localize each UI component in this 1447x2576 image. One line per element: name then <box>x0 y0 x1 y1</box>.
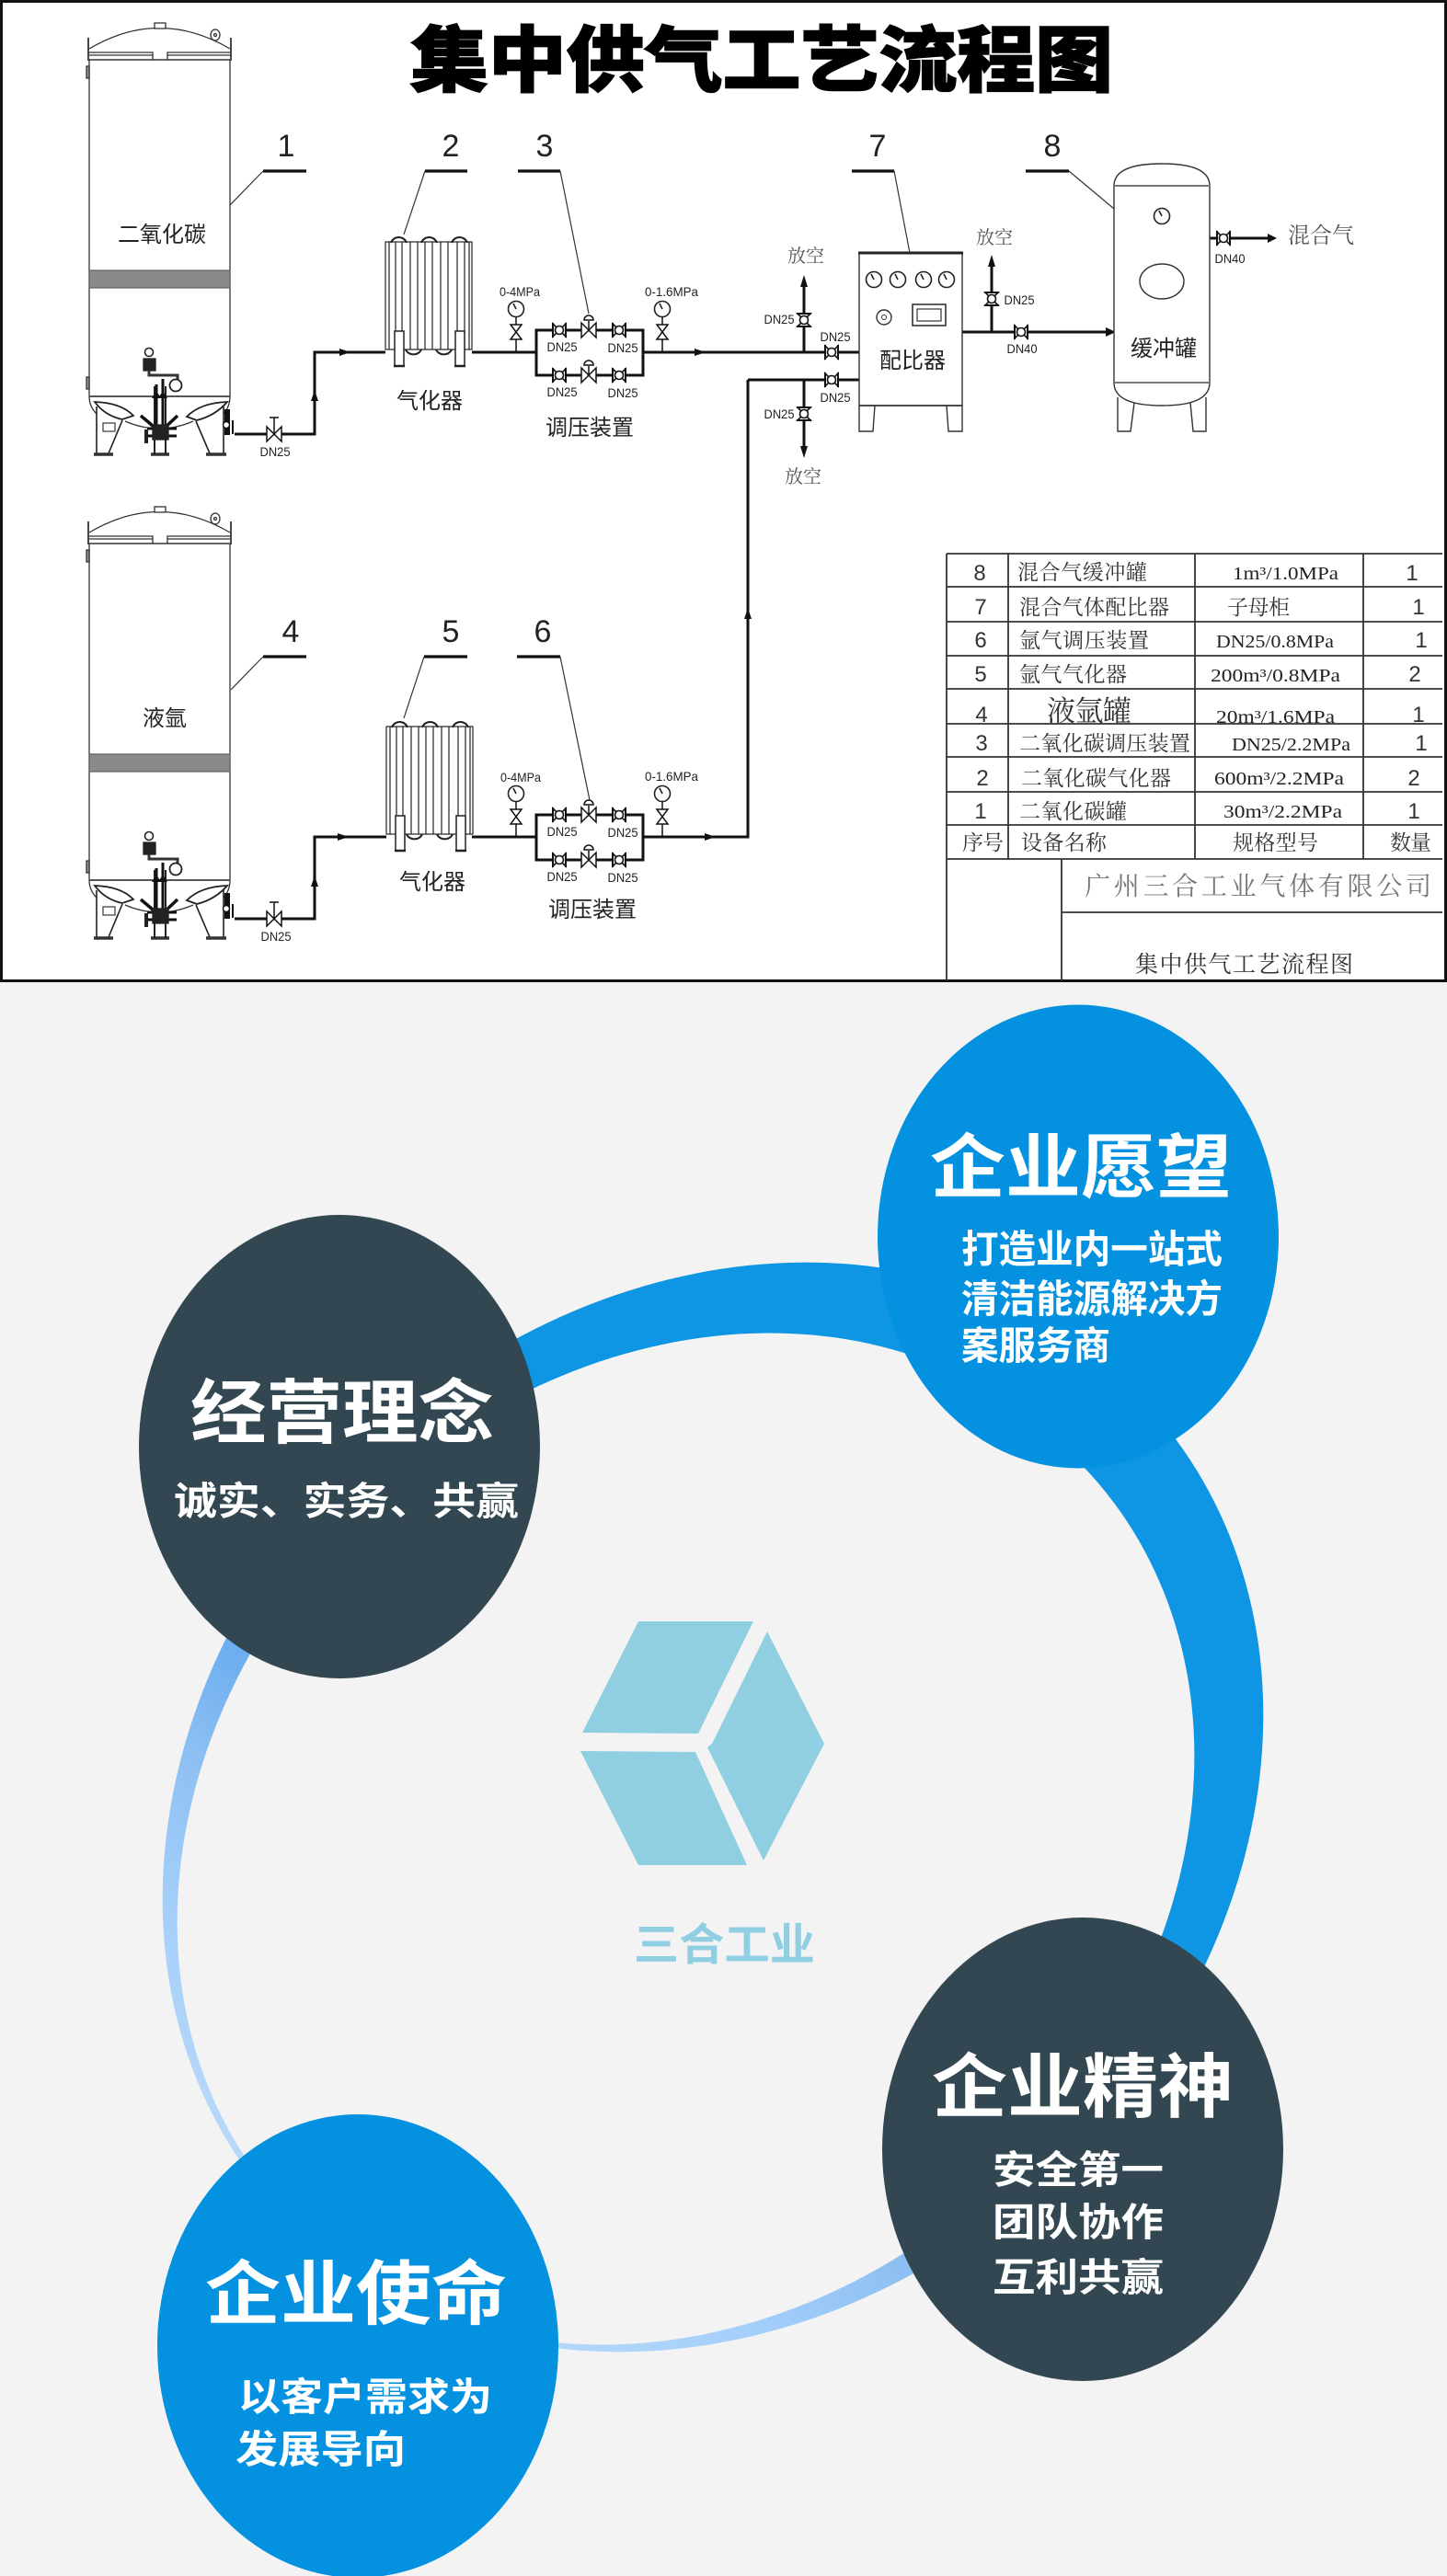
mixing cabinet 7 <box>858 253 963 431</box>
vaporizer 5 <box>386 722 473 895</box>
buffer tank 8 <box>1114 164 1210 431</box>
bubble: business philosophy <box>139 1215 540 1678</box>
pipework with arrows and tank outlet valves: DN25 <box>764 312 795 326</box>
callouts: item numbers with leader lines: 2 <box>442 129 459 164</box>
bubble: corporate spirit <box>882 1918 1283 2381</box>
equipment table: DN25/2.2MPa <box>1232 735 1350 755</box>
equipment table: 4 <box>975 703 988 727</box>
equipment table: 氩气气化器 <box>1019 663 1127 686</box>
equipment table: 20m³/1.6MPa <box>1216 707 1335 727</box>
bubble: corporate vision: 清洁能源解决方 <box>961 1277 1223 1321</box>
equipment table: 混合气体配比器 <box>1019 596 1169 619</box>
equipment table: 二氧化碳调压装置 <box>1019 732 1190 755</box>
callouts: item numbers with leader lines: 8 <box>1044 129 1061 164</box>
equipment table: 集中供气工艺流程图 <box>1135 952 1353 978</box>
pressure regulator unit 6 <box>472 769 698 922</box>
callouts: item numbers with leader lines: 1 <box>278 129 294 164</box>
mixing cabinet 7: 配比器 <box>879 349 946 373</box>
title: 集中供气工艺流程图 <box>410 20 1113 101</box>
pressure regulator unit 6: 调压装置 <box>548 898 637 922</box>
equipment table: 1 <box>1415 731 1428 756</box>
bubble: business philosophy: 诚实、实务、共赢 <box>174 1480 519 1523</box>
equipment table: 1 <box>1415 628 1428 653</box>
equipment table: 200m³/0.8MPa <box>1211 666 1340 686</box>
callouts: item numbers with leader lines: 4 <box>282 614 299 649</box>
pressure regulator unit 3: DN25 <box>607 340 638 355</box>
pipework with arrows and tank outlet valves: DN25 <box>1005 292 1035 307</box>
pressure regulator unit 6: DN25 <box>546 824 578 839</box>
callouts: item numbers with leader lines: 3 <box>536 129 553 164</box>
pipework with arrows and tank outlet valves <box>235 223 1354 944</box>
equipment table: 6 <box>974 628 987 653</box>
equipment table: 数量 <box>1390 831 1431 854</box>
ring <box>163 1263 1263 2352</box>
pipework with arrows and tank outlet valves: DN25 <box>821 390 851 405</box>
bubble: corporate vision: 企业愿望 <box>930 1129 1232 1208</box>
pipework with arrows and tank outlet valves: DN25 <box>821 329 851 344</box>
equipment table: 8 <box>973 561 986 586</box>
pressure regulator unit 3: 调压装置 <box>545 416 634 441</box>
pipework with arrows and tank outlet valves: 放空 <box>787 246 824 267</box>
callouts: item numbers with leader lines: 7 <box>869 129 886 164</box>
equipment table: 广州三合工业气体有限公司 <box>1085 872 1431 901</box>
pipework with arrows and tank outlet valves: DN25 <box>261 929 292 944</box>
buffer tank 8: 缓冲罐 <box>1131 337 1197 361</box>
equipment table: 序号 <box>962 831 1004 854</box>
pipework with arrows and tank outlet valves: 混合气 <box>1288 223 1354 248</box>
pressure regulator unit 3: DN25 <box>607 385 638 400</box>
equipment table: 5 <box>974 662 987 687</box>
logo wordmark: 三合工业 <box>634 1921 815 1970</box>
equipment table: 设备名称 <box>1021 831 1108 854</box>
panel: process flow diagram <box>2 2 1446 980</box>
bubble: corporate mission: 以客户需求为 <box>238 2376 492 2419</box>
logo: cube icon <box>580 1621 824 1865</box>
equipment table: 2 <box>1408 662 1421 687</box>
vaporizer 2 <box>385 237 472 414</box>
equipment table: 混合气缓冲罐 <box>1017 561 1147 584</box>
equipment table: 氩气调压装置 <box>1019 629 1149 652</box>
pipework with arrows and tank outlet valves: DN40 <box>1214 251 1246 266</box>
pipework with arrows and tank outlet valves: DN40 <box>1006 341 1038 356</box>
pipework with arrows and tank outlet valves: 放空 <box>976 227 1013 248</box>
callouts: item numbers with leader lines: 6 <box>534 614 551 649</box>
tank 1: carbon dioxide <box>86 23 233 454</box>
bubble: corporate vision: 打造业内一站式 <box>961 1228 1223 1271</box>
bubble: corporate mission: 企业使命 <box>205 2256 507 2334</box>
equipment table: 2 <box>976 766 989 791</box>
pipework with arrows and tank outlet valves: 放空 <box>785 466 821 487</box>
pressure regulator unit 3: 0-1.6MPa <box>645 284 698 299</box>
equipment table: DN25/0.8MPa <box>1216 632 1334 652</box>
equipment table: 二氧化碳气化器 <box>1021 767 1171 790</box>
pressure regulator unit 6: DN25 <box>607 870 638 885</box>
panel: corporate culture ring <box>139 1004 1283 2576</box>
equipment table: 3 <box>975 731 988 756</box>
pressure regulator unit 6: DN25 <box>546 869 578 884</box>
equipment table: 1 <box>974 799 987 824</box>
equipment table: 二氧化碳罐 <box>1019 800 1127 823</box>
vaporizer 2: 气化器 <box>396 389 463 414</box>
equipment table: 规格型号 <box>1233 831 1318 854</box>
equipment table <box>947 554 1442 980</box>
equipment table: 液氩罐 <box>1047 695 1131 727</box>
bubble: corporate spirit: 安全第一 <box>993 2148 1164 2192</box>
equipment table: 7 <box>974 595 987 620</box>
equipment table: 1m³/1.0MPa <box>1233 564 1338 584</box>
bubble: corporate spirit: 企业精神 <box>932 2049 1234 2127</box>
equipment table: 600m³/2.2MPa <box>1214 769 1344 789</box>
bubble: business philosophy: 经营理念 <box>190 1375 494 1453</box>
bubble: corporate vision: 案服务商 <box>961 1324 1110 1368</box>
equipment table: 30m³/2.2MPa <box>1223 802 1342 822</box>
pipework with arrows and tank outlet valves: DN25 <box>764 406 795 421</box>
tank 4: liquid argon: 液氩 <box>143 706 187 731</box>
equipment table: 1 <box>1406 561 1418 586</box>
equipment table: 1 <box>1412 595 1425 620</box>
tank 1: carbon dioxide: 二氧化碳 <box>118 223 206 247</box>
bubble: corporate mission <box>157 2114 558 2576</box>
pipework with arrows and tank outlet valves: DN25 <box>259 444 291 459</box>
tank 4: liquid argon <box>86 507 233 938</box>
bubble: corporate spirit: 互利共赢 <box>993 2256 1164 2299</box>
pressure regulator unit 6: DN25 <box>607 825 638 840</box>
bubble: corporate vision <box>878 1004 1279 1468</box>
callouts: item numbers with leader lines: 5 <box>442 614 459 649</box>
equipment table: 1 <box>1407 799 1420 824</box>
equipment table: 1 <box>1412 703 1425 727</box>
pressure regulator unit 3: 0-4MPa <box>500 284 540 299</box>
pressure regulator unit 3: DN25 <box>546 384 578 399</box>
bubble: corporate mission: 发展导向 <box>235 2428 406 2471</box>
callouts: item numbers with leader lines <box>230 129 1114 800</box>
equipment table: 子母柜 <box>1227 596 1290 619</box>
bubble: corporate spirit: 团队协作 <box>993 2201 1164 2244</box>
pressure regulator unit 3: DN25 <box>546 339 578 354</box>
pressure regulator unit 6: 0-1.6MPa <box>645 769 698 784</box>
pressure regulator unit 6: 0-4MPa <box>500 770 541 784</box>
equipment table: 2 <box>1407 766 1420 791</box>
pressure regulator unit 3 <box>472 284 698 441</box>
vaporizer 5: 气化器 <box>399 870 465 895</box>
